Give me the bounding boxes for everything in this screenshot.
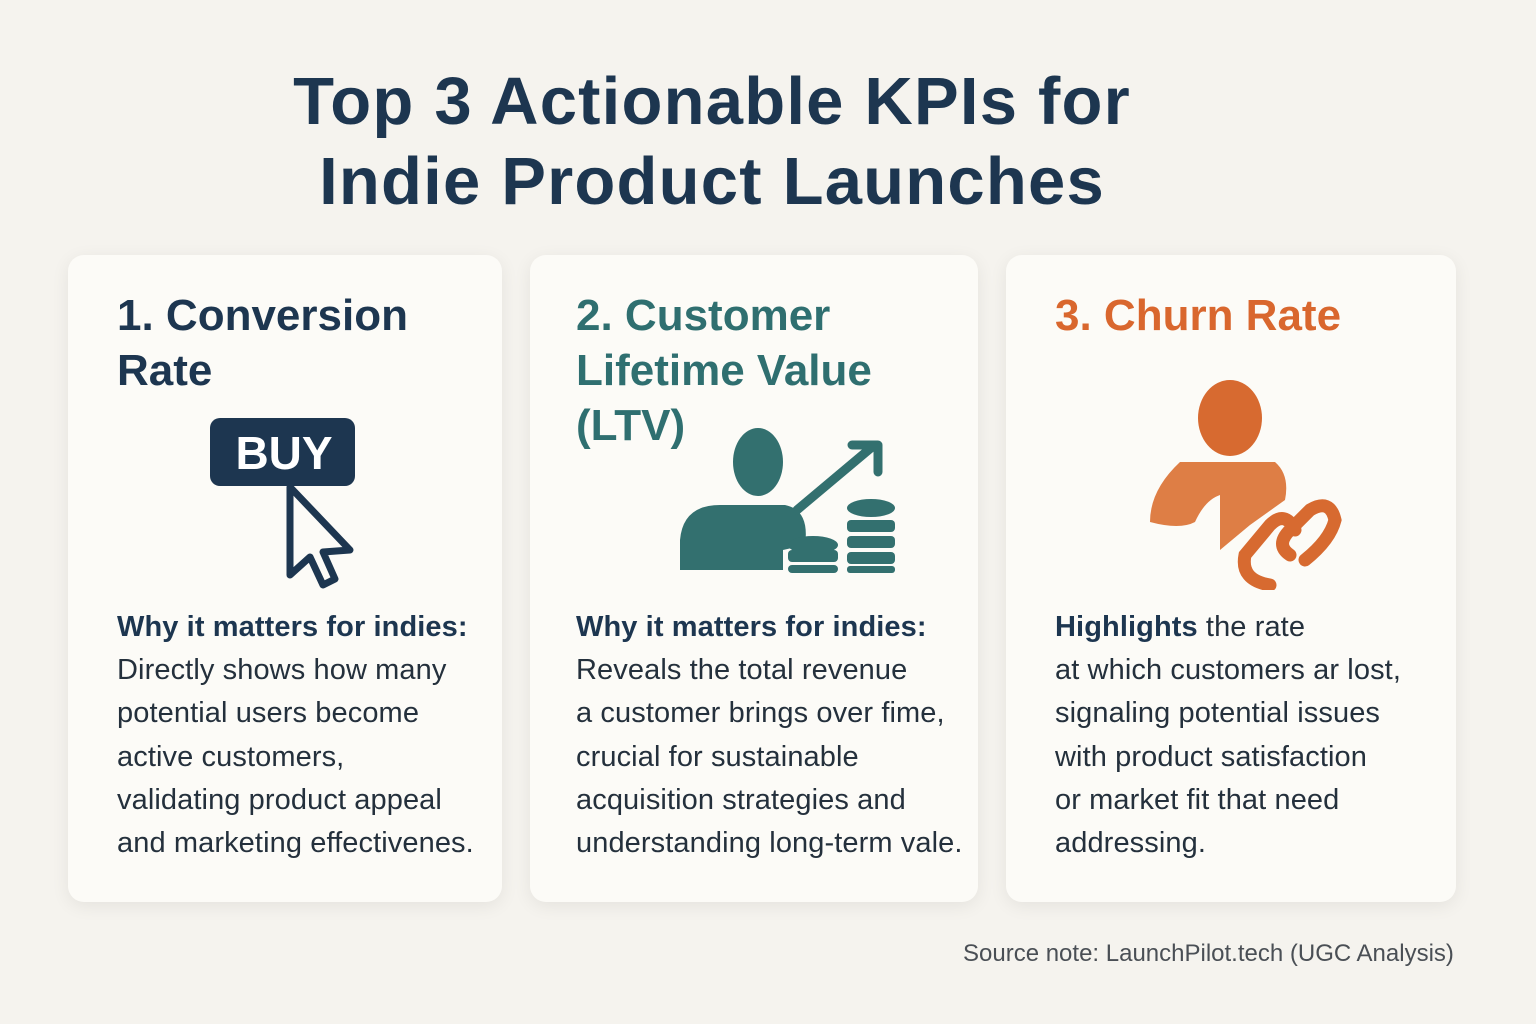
heading 2: (LTV) [576, 401, 685, 450]
icon: buy button [210, 418, 355, 588]
body 2: Why it matters for indies: [576, 611, 927, 643]
source note: Source note: LaunchPilot.tech (UGC Analysis) [963, 940, 1454, 967]
title: Indie Product Launches [319, 144, 1105, 219]
heading 1: 1. Conversion [117, 291, 408, 340]
body 1: Directly shows how many [117, 654, 446, 686]
body 1: validating product appeal [117, 784, 442, 816]
body 3: signaling potential issues [1055, 697, 1380, 729]
body 3: at which customers ar lost, [1055, 654, 1401, 686]
body 1: active customers, [117, 741, 344, 773]
body 1: Why it matters for indies: [117, 611, 468, 643]
body 3: addressing. [1055, 827, 1206, 859]
title: Top 3 Actionable KPIs for [293, 64, 1131, 139]
heading 2: Lifetime Value [576, 346, 872, 395]
icon: person with coins [680, 428, 895, 573]
heading 1: Rate [117, 346, 212, 395]
body 2 [576, 611, 963, 859]
body 1: and marketing effectivenes. [117, 827, 474, 859]
body 1 [117, 611, 474, 859]
icon: person with broken link [1150, 380, 1342, 590]
heading 1 [117, 291, 408, 395]
panel: churn [1006, 255, 1456, 902]
heading 2: 2. Customer [576, 291, 830, 340]
body 3: or market fit that need [1055, 784, 1339, 816]
body 2: a customer brings over fime, [576, 697, 945, 729]
body 3: Highlights the rate [1055, 611, 1305, 643]
body 2: crucial for sustainable [576, 741, 859, 773]
heading 2 [576, 291, 872, 450]
body 3 [1055, 611, 1401, 859]
heading 3: 3. Churn Rate [1055, 291, 1341, 340]
body 2: acquisition strategies and [576, 784, 906, 816]
body 1: potential users become [117, 697, 419, 729]
icon: buy button: BUY [235, 427, 333, 479]
body 2: understanding long-term vale. [576, 827, 963, 859]
panel: LTV [530, 255, 978, 902]
panel: conversion rate [68, 255, 502, 902]
body 3: with product satisfaction [1055, 741, 1367, 773]
title [293, 64, 1131, 219]
body 2: Reveals the total revenue [576, 654, 907, 686]
